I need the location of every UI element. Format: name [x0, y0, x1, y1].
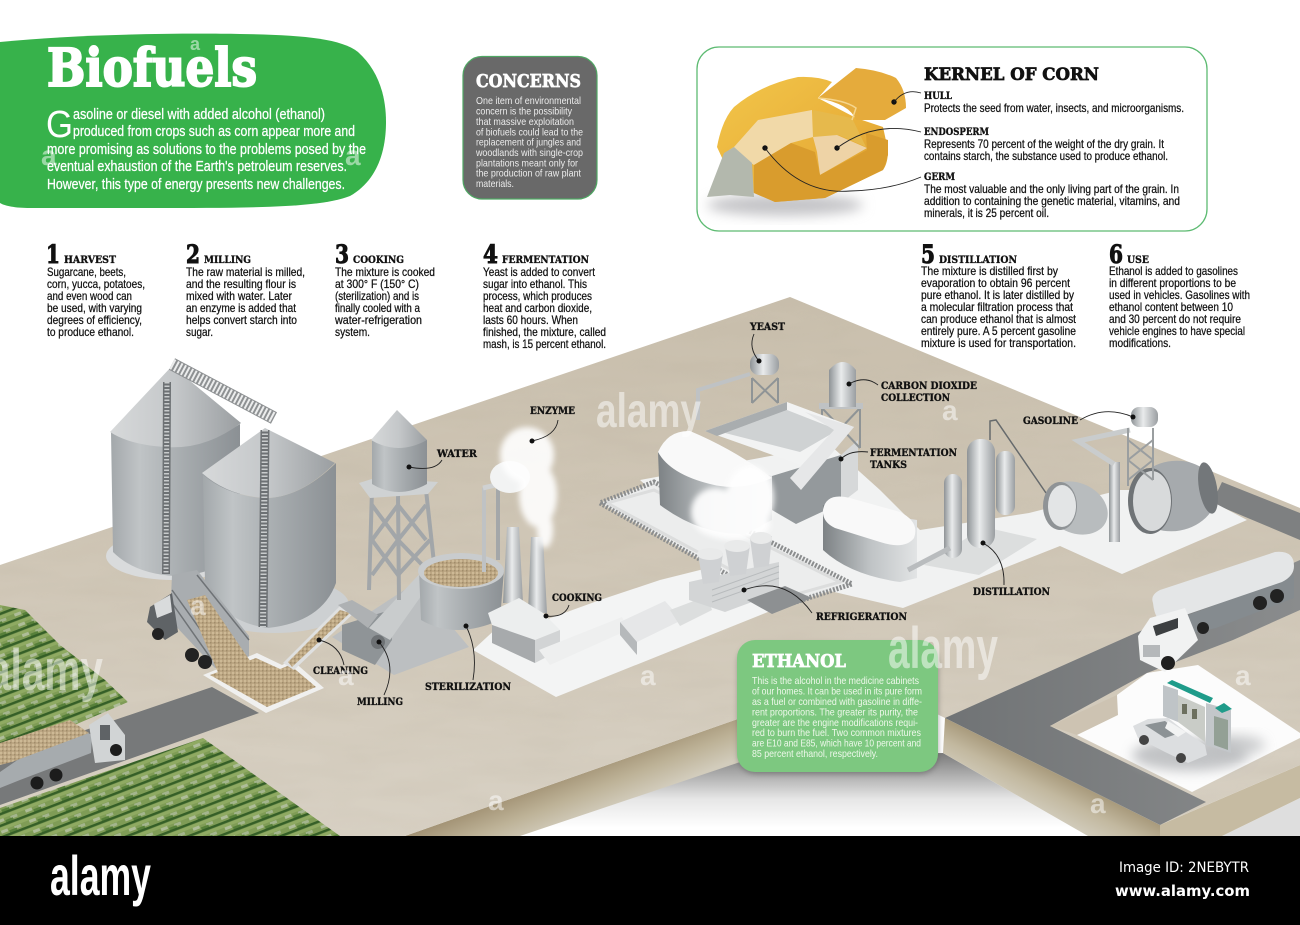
watermarks: a [41, 140, 57, 171]
label: water: WATER [436, 448, 477, 460]
step 5: distillation: 5 [921, 240, 935, 269]
step 3: cooking: The mixture is cooked [335, 265, 435, 279]
step 6: use: 6 [1109, 240, 1123, 269]
ethanol text: This is the alcohol in the medicine cabinets [752, 675, 919, 687]
concerns text: plantations meant only for [476, 158, 578, 170]
step 4: fermentation [483, 240, 606, 351]
title: Biofuels [47, 38, 257, 99]
label: cleaning [313, 638, 368, 677]
slab: earth sides [405, 676, 1300, 836]
step 5: distillation: a molecular filtration process that [921, 300, 1074, 314]
slab: sand surface [0, 297, 1300, 836]
germ text: addition to containing the genetic material, vitamins, and [924, 194, 1180, 208]
field: upper crop rows [0, 605, 128, 757]
germ text: The most valuable and the only living part of the grain. In [924, 182, 1179, 196]
pad: gas station [1050, 665, 1300, 792]
fermentation tank left with foam [658, 431, 772, 534]
concerns text: One item of environmental [476, 95, 581, 107]
label: carbon dioxide collection: CARBON DIOXIDE [881, 380, 977, 392]
label: distillation [973, 540, 1050, 598]
ethanol text: as a fuel or combined with gasoline in diffe- [752, 696, 922, 708]
step 6: use: in different proportions to be [1109, 276, 1236, 290]
gasoline storage tanks [1036, 407, 1222, 545]
watermarks: alamy [888, 616, 998, 681]
watermarks: alamy [596, 385, 701, 438]
steam: fermentation [691, 466, 774, 540]
watermarks: a [190, 34, 201, 54]
pad: cooking and pipeline [473, 560, 783, 697]
step 1: harvest: Sugarcane, beets, [47, 265, 126, 279]
step 6: use: and 30 percent do not require [1109, 312, 1241, 326]
endosperm text: Represents 70 percent of the weight of the dry grain. It [924, 137, 1165, 151]
mill pad and machine [332, 568, 469, 675]
watermarks: a [190, 590, 206, 621]
step 1: harvest: to produce ethanol. [47, 325, 134, 339]
website: www.alamy.com [1115, 882, 1250, 900]
step 4: fermentation: finished, the mixture, called [483, 325, 606, 339]
watermarks: a [345, 140, 361, 171]
label: sterilization: STERILIZATION [425, 681, 511, 693]
step 6: use: ethanol content between 10 [1109, 300, 1233, 314]
step 2: milling: The raw material is milled, [186, 265, 305, 279]
step 4: fermentation: mash, is 15 percent ethanol. [483, 337, 606, 351]
dump truck unloading [147, 570, 249, 669]
step 5: distillation: evaporation to obtain 96 percent [921, 276, 1071, 290]
germ text: GERM [924, 171, 955, 183]
fermentation tank roof frame [705, 402, 854, 490]
step 1: harvest: degrees of efficiency, [47, 313, 142, 327]
step 4: fermentation: heat and carbon dioxide, [483, 301, 592, 315]
panel: ethanol [737, 640, 938, 774]
intro text: However, this type of energy presents new challenges. [47, 177, 345, 193]
step 5: distillation: mixture is used for transportation. [921, 336, 1076, 350]
ethanol text: rent proportions. The greater its purity, the [752, 706, 918, 718]
label: fermentation tanks: FERMENTATION [870, 447, 957, 459]
concerns text: the production of raw plant [476, 168, 581, 180]
germ text [924, 171, 1180, 220]
hull text: Protects the seed from water, insects, and microorganisms. [924, 101, 1184, 115]
step 6: use: USE [1127, 254, 1149, 266]
step 3: cooking: COOKING [353, 254, 404, 266]
ethanol text: red to burn the fuel. Two common mixtures [752, 727, 921, 739]
label: distillation: DISTILLATION [973, 586, 1050, 598]
watermarks: a [640, 660, 656, 691]
step 3: cooking: at 300° F (150° C) [335, 277, 419, 291]
yeast tank and tower [698, 354, 779, 420]
label: cooking [544, 592, 602, 618]
carbon dioxide tank and tower [819, 362, 863, 448]
callout labels on the plant [313, 321, 1136, 708]
step 4: fermentation: sugar into ethanol. This [483, 277, 587, 291]
label: yeast: YEAST [749, 321, 785, 333]
endosperm text: ENDOSPERM [924, 126, 989, 138]
label: cleaning: CLEANING [313, 665, 368, 677]
step 3: cooking: system. [335, 325, 370, 339]
label: refrigeration [742, 586, 907, 623]
step 1: harvest: 1 [46, 240, 60, 269]
ethanol text: 85 percent ethanol, respectively. [752, 748, 878, 760]
step 2: milling: 2 [186, 240, 200, 269]
intro text: asoline or diesel with added alcohol (ethanol) [73, 107, 325, 123]
label: gasoline [1023, 412, 1136, 427]
road: field access [0, 687, 259, 805]
step 3: cooking [334, 240, 435, 339]
concerns text: concern is the possibility [476, 106, 573, 118]
step 3: cooking: water-refrigeration [334, 313, 422, 327]
grain hopper with corn pile [187, 595, 324, 713]
truck on road [0, 713, 125, 790]
gas station [1163, 680, 1232, 753]
step 4: fermentation: Yeast is added to convert [483, 265, 596, 279]
endosperm text [924, 126, 1168, 163]
distillation columns [908, 420, 1046, 575]
title panel [0, 34, 386, 208]
silo 2 [201, 428, 349, 633]
ground shadow under the slab [520, 753, 1300, 836]
water tower [359, 410, 438, 600]
bottom bar [0, 836, 1300, 925]
step 4: fermentation: FERMENTATION [502, 254, 589, 266]
watermarks: a [338, 660, 354, 691]
label: enzyme [530, 405, 575, 444]
fermentation tank front [823, 496, 917, 582]
ethanol heading: ETHANOL [752, 651, 846, 672]
step 2: milling: helps convert starch into [186, 313, 297, 327]
step 5: distillation: pure ethanol. It is later distilled by [921, 288, 1074, 302]
pad: fermentation and distillation [640, 445, 1247, 608]
step 4: fermentation: 4 [483, 240, 498, 269]
ethanol text: greater are the engine modifications requi- [752, 717, 918, 729]
label: fermentation tanks: TANKS [870, 459, 907, 471]
step 5: distillation: entirely pure. A 5 percent gasoline [921, 324, 1076, 338]
label: refrigeration: REFRIGERATION [816, 611, 907, 623]
label: fermentation tanks [838, 447, 957, 471]
step 3: cooking: 3 [335, 240, 349, 269]
enzyme tank and pipe [483, 461, 530, 572]
ethanol text: of our homes. It can be used in its pure form [752, 686, 922, 698]
step 6: use: vehicle engines to have special [1109, 324, 1245, 338]
step 6: use: modifications. [1109, 336, 1171, 350]
field: lower crop rows [0, 738, 340, 836]
step 2: milling: sugar. [186, 325, 213, 339]
silo 1 [106, 366, 241, 580]
fermentation tank rear [772, 440, 858, 524]
cooking chimneys and furnace [488, 527, 628, 665]
sterilization vessel [418, 553, 504, 630]
step 2: milling: mixed with water. Later [186, 289, 292, 303]
label: water [406, 448, 477, 470]
panel: concerns [463, 56, 597, 199]
refrigeration cooling unit [689, 532, 812, 614]
step 1: harvest: and even wood can [47, 289, 132, 303]
label: carbon dioxide collection [846, 380, 977, 404]
intro text: G [46, 104, 73, 146]
step 1: harvest: corn, yucca, potatoes, [47, 277, 145, 291]
step 1: harvest: HARVEST [64, 254, 116, 266]
step 5: distillation: DISTILLATION [939, 254, 1017, 266]
label: enzyme: ENZYME [530, 405, 575, 417]
step 5: distillation: The mixture is distilled first by [921, 264, 1058, 278]
watermarks: a [488, 785, 504, 816]
pad: refrigeration basin [600, 482, 852, 606]
step 4: fermentation: process, which produces [483, 289, 592, 303]
intro text [46, 104, 366, 193]
step 1: harvest [46, 240, 145, 339]
step 6: use [1109, 240, 1250, 350]
intro text: produced from crops such as corn appear more and [73, 124, 355, 140]
concerns text [475, 95, 583, 190]
label: yeast [749, 321, 785, 364]
concerns text: of biofuels could lead to the [476, 126, 583, 138]
step 6: use: used in vehicles. Gasolines with [1109, 288, 1250, 302]
road: main and station approach [945, 560, 1300, 825]
label: carbon dioxide collection: COLLECTION [881, 392, 950, 404]
step 6: use: Ethanol is added to gasolines [1109, 264, 1238, 278]
step 2: milling: an enzyme is added that [186, 301, 297, 315]
concerns text: materials. [476, 178, 514, 190]
panel: kernel of corn [697, 47, 1207, 231]
concerns text: woodlands with single-crop [475, 147, 583, 159]
watermarks: a [1090, 788, 1106, 819]
road: upper right [1212, 482, 1300, 540]
step 5: distillation: can produce ethanol that is almost [921, 312, 1077, 326]
conveyor truss between silos [172, 364, 274, 418]
concerns text: that massive exploitation [476, 116, 574, 128]
icon: corn kernel [707, 68, 921, 216]
ethanol text: are E10 and E85, which have 10 percent and [752, 738, 921, 750]
step 2: milling: and the resulting flour is [186, 277, 296, 291]
tanker truck [1138, 552, 1294, 672]
steam: enzyme [500, 427, 557, 548]
intro text: more promising as solutions to the problems posed by the [47, 142, 366, 158]
step 4: fermentation: lasts 60 hours. When [483, 313, 578, 327]
hull text [924, 90, 1184, 115]
image id: Image ID: 2NEBYTR [1119, 860, 1249, 876]
hull text: HULL [924, 90, 953, 102]
step 3: cooking: (sterilization) and is [335, 289, 419, 303]
watermarks: a [942, 395, 958, 426]
label: milling [357, 640, 403, 708]
intro text: eventual exhaustion of the Earth's petroleum reserves. [47, 159, 347, 175]
step 2: milling [186, 240, 305, 339]
concerns heading: CONCERNS [476, 71, 581, 92]
step 3: cooking: finally cooled with a [335, 301, 420, 315]
ethanol text [752, 675, 922, 760]
concerns text: replacement of jungles and [476, 136, 581, 148]
cleaning conveyor [283, 606, 355, 670]
alamy logo: alamy [50, 844, 151, 907]
germ text: minerals, it is 25 percent oil. [924, 206, 1049, 220]
step 1: harvest: be used, with varying [47, 301, 142, 315]
pipeline sections [620, 596, 712, 655]
car [1133, 718, 1207, 763]
label: gasoline: GASOLINE [1023, 415, 1078, 427]
label: cooking: COOKING [552, 592, 602, 604]
label: sterilization [425, 624, 511, 693]
kernel heading: KERNEL OF CORN [924, 65, 1099, 85]
label: milling: MILLING [357, 696, 403, 708]
endosperm text: contains starch, the substance used to produce ethanol. [924, 149, 1168, 163]
watermarks: a [1235, 660, 1251, 691]
step 2: milling: MILLING [204, 254, 251, 266]
step 5: distillation [921, 240, 1077, 350]
kernel callout lines [762, 92, 921, 191]
